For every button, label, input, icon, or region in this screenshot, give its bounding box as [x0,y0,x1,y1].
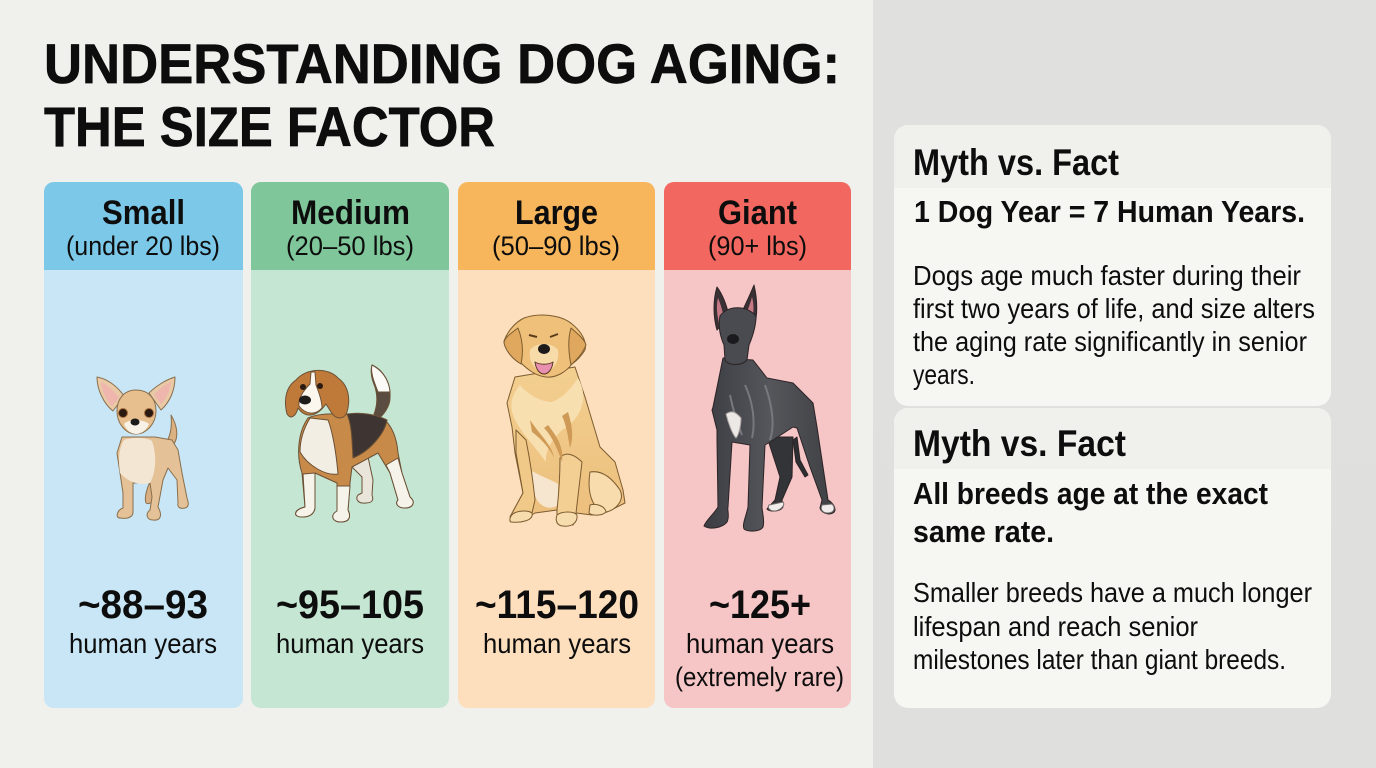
header: small [44,182,243,270]
value: large lifespan: ~115–120 [475,583,639,627]
icon: beagle [285,365,413,522]
value: giant lifespan: ~125+ [709,583,811,627]
panel: myth 2 [894,408,1331,708]
header: small: (under 20 lbs) [66,231,220,261]
title: UNDERSTANDING DOG AGING: [44,32,840,95]
panel: medium dogs [251,182,449,708]
fact text 2: milestones later than giant breeds. [913,644,1286,675]
value: large lifespan: human years [483,628,631,659]
header: medium [251,182,449,270]
icon: great dane [704,285,835,531]
panel: large dogs [458,182,655,708]
header: giant: Giant [718,194,797,232]
heading: myth vs fact 1 [894,125,1331,188]
title: THE SIZE FACTOR [44,95,495,158]
value: medium lifespan: human years [276,628,424,659]
fact text 2: Smaller breeds have a much longer [913,577,1312,608]
value: giant lifespan: (extremely rare) [675,662,844,692]
fact text 1: the aging rate significantly in senior [913,326,1307,357]
icon: golden retriever [504,315,625,526]
value: medium lifespan [276,583,424,659]
icon: chihuahua [97,377,188,520]
header: small: Small [102,194,185,232]
fact text 1: Dogs age much faster during their [913,260,1301,291]
heading: myth vs fact 1: Myth vs. Fact [913,142,1119,183]
value: large lifespan [475,583,639,659]
header: large: (50–90 lbs) [492,231,620,261]
myth statement 2: All breeds age at the exact [913,476,1268,511]
header: medium: Medium [291,194,410,232]
title [44,32,840,158]
value: small lifespan: ~88–93 [78,583,208,627]
value: medium lifespan: ~95–105 [276,583,424,627]
header: medium: (20–50 lbs) [286,231,414,261]
value: small lifespan [69,583,217,659]
value: giant lifespan: human years [686,628,834,659]
header: large: Large [515,194,598,232]
panel: giant dogs [664,182,851,708]
heading: myth vs fact 2: Myth vs. Fact [913,423,1126,464]
panel: small dogs [44,182,243,708]
fact text 1: first two years of life, and size alters [913,293,1315,324]
value: giant lifespan [675,583,844,692]
fact text 2: lifespan and reach senior [913,611,1198,642]
fact text 2 [913,577,1312,675]
header: giant: (90+ lbs) [708,231,807,261]
fact text 1 [913,260,1315,390]
header: large [458,182,655,270]
value: small lifespan: human years [69,628,217,659]
myth statement 2 [913,476,1268,549]
myth statement 1: 1 Dog Year = 7 Human Years. [914,194,1305,229]
header: giant [664,182,851,270]
background: right area [873,0,1376,768]
myth statement 2: same rate. [913,514,1054,549]
heading: myth vs fact 2 [894,408,1331,469]
background: left area [0,0,873,768]
fact text 1: years. [913,359,975,390]
panel: myth 1 [894,125,1331,406]
